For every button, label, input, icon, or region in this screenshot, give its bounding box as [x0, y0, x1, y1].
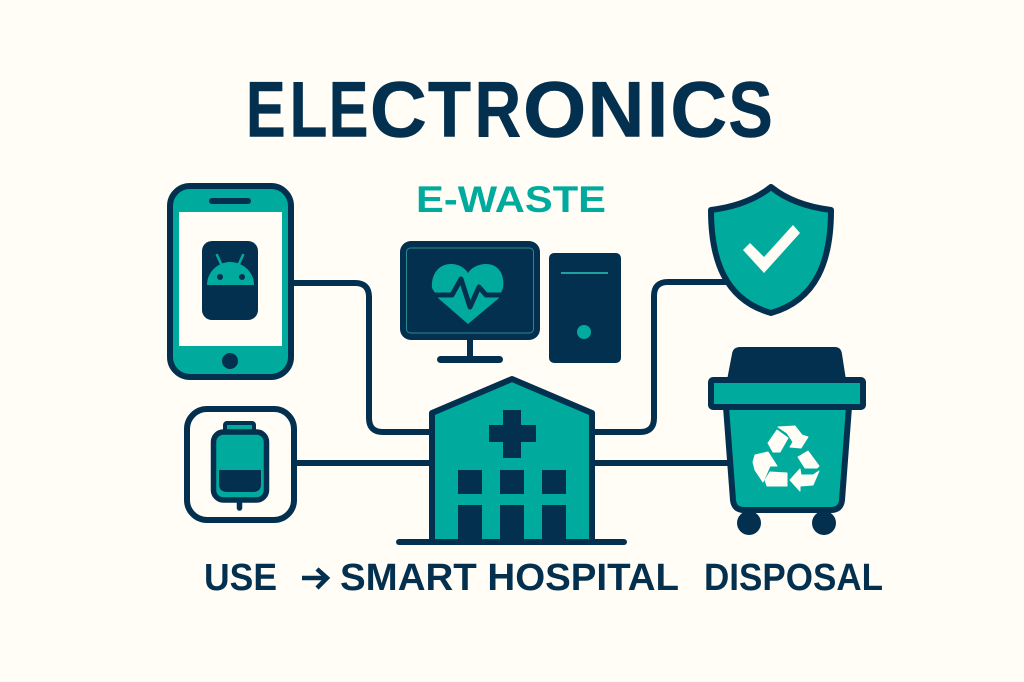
title: E [329, 64, 368, 154]
icon: computer tower [549, 253, 621, 363]
icon: smartphone [170, 186, 291, 377]
icon: hospital [396, 379, 627, 545]
icon: shield with check [711, 187, 831, 313]
icon: recycling bin [711, 347, 863, 535]
title: N [588, 64, 644, 154]
icon: desktop monitor with heartbeat [400, 241, 540, 363]
icon: heart [429, 264, 506, 324]
icon: recycling symbol [753, 426, 819, 491]
icon: battery in frame [187, 409, 294, 520]
title: T [428, 64, 471, 154]
subtitle: e-waste: E-WASTE [416, 179, 606, 220]
title: C [370, 64, 427, 154]
title: E [246, 64, 286, 154]
label: disposal: DISPOSAL [704, 557, 883, 599]
arrow: use to smart hospital [302, 569, 327, 588]
title: O [523, 64, 586, 154]
title: S [728, 64, 773, 154]
title: L [290, 64, 327, 154]
title: C [670, 64, 727, 154]
connector lines [292, 282, 730, 463]
label: use: USE [204, 557, 277, 599]
icon: android app [202, 241, 258, 320]
label: smart hospital: SMART HOSPITAL [340, 557, 679, 599]
title: R [475, 64, 521, 154]
title: I [647, 64, 668, 154]
